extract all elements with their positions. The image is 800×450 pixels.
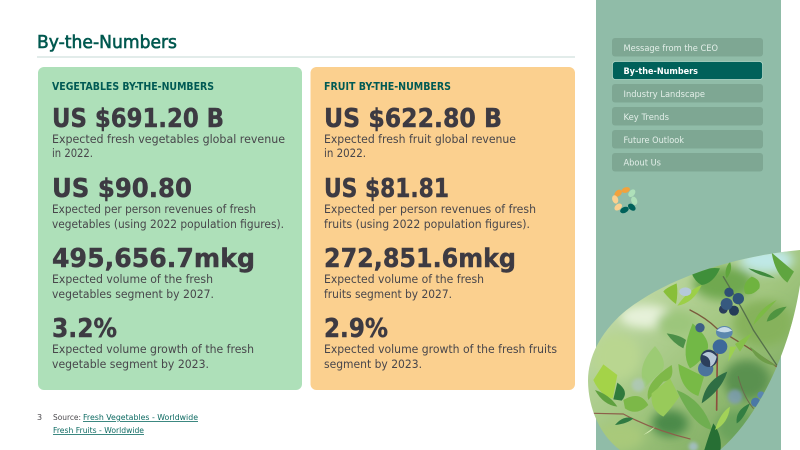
- fruit heading: FRUIT BY-THE-NUMBERS: [324, 82, 451, 93]
- stat: global revenue: in 2022.: [52, 146, 93, 160]
- stat: global revenue: [52, 104, 285, 160]
- icon: petal logo: [611, 186, 638, 215]
- stat: global revenue: US $691.20 B: [52, 104, 224, 134]
- navigation menu: [612, 38, 763, 172]
- page number: 3: [37, 413, 42, 422]
- sidebar panel: [596, 0, 781, 450]
- title: By-the-Numbers: [37, 32, 177, 53]
- source note: [53, 413, 198, 435]
- stat: volume: 495,656.7mkg: [52, 244, 255, 274]
- stat: volume: vegetables segment by 2027.: [52, 287, 214, 301]
- panel: vegetables: [38, 67, 302, 390]
- stat: volume growth: 3.2%: [52, 314, 117, 344]
- nav: Key Trends: Key Trends: [624, 113, 669, 123]
- nav: Industry Landscape: [612, 84, 763, 102]
- stat: volume: Expected volume of the fresh: [324, 272, 484, 286]
- stat: volume growth: segment by 2023.: [324, 357, 422, 371]
- stat: global revenue: US $622.80 B: [324, 104, 502, 134]
- stat: volume: fruits segment by 2027.: [324, 287, 452, 301]
- nav: By-the-Numbers active: [612, 62, 762, 80]
- source note: Fresh Fruits - Worldwide: [53, 426, 144, 435]
- stat: volume: 272,851.6mkg: [324, 244, 516, 274]
- nav: Message from the CEO: Message from the CEO: [624, 44, 718, 54]
- stat: volume growth: [52, 314, 254, 371]
- stat: per person revenue: Expected per person revenues of fresh: [52, 202, 256, 216]
- panel: fruit: [310, 67, 575, 390]
- stat: per person revenue: Expected per person revenues of fresh: [324, 202, 536, 216]
- source note: Source:: [53, 413, 81, 422]
- branches: [593, 277, 777, 439]
- vegetables heading: VEGETABLES BY-THE-NUMBERS: [52, 82, 214, 93]
- stat: volume growth: [324, 314, 557, 371]
- stat: per person revenue: vegetables (using 2022 population figures).: [52, 217, 284, 231]
- stat: per person revenue: US $90.80: [52, 174, 192, 204]
- nav: Message from the CEO: [612, 38, 763, 56]
- source note: Fresh Vegetables - Worldwide: [83, 413, 198, 422]
- stat: global revenue: Expected fresh fruit global revenue: [324, 132, 516, 146]
- nav: Future Outlook: Future Outlook: [624, 136, 685, 146]
- stat: volume growth: Expected volume growth of the fresh: [52, 342, 254, 356]
- stat: global revenue: [324, 104, 516, 160]
- stat: per person revenue: fruits (using 2022 population figures).: [324, 217, 530, 231]
- stat: volume: [52, 244, 255, 301]
- stat: per person revenue: [324, 174, 536, 231]
- stat: volume: [324, 244, 516, 301]
- nav: Key Trends: [612, 107, 763, 126]
- nav: By-the-Numbers active: By-the-Numbers: [624, 67, 698, 77]
- nav: Industry Landscape: Industry Landscape: [624, 90, 705, 100]
- nav: Future Outlook: [612, 130, 763, 148]
- leaves: [772, 253, 794, 283]
- stat: volume: Expected volume of the fresh: [52, 272, 213, 286]
- nav: About Us: [612, 153, 763, 172]
- photo: blueberry branch in leaf shape: [585, 247, 800, 450]
- stat: volume growth: vegetable segment by 2023.: [52, 357, 209, 371]
- stat: volume growth: 2.9%: [324, 314, 388, 344]
- berries: [724, 288, 734, 297]
- stat: per person revenue: [52, 174, 284, 231]
- stat: volume growth: Expected volume growth of the fresh fruits: [324, 342, 557, 356]
- nav: About Us: About Us: [624, 158, 661, 168]
- stat: global revenue: in 2022.: [324, 146, 366, 160]
- stat: per person revenue: US $81.81: [324, 174, 449, 204]
- stat: global revenue: Expected fresh vegetables global revenue: [52, 132, 285, 146]
